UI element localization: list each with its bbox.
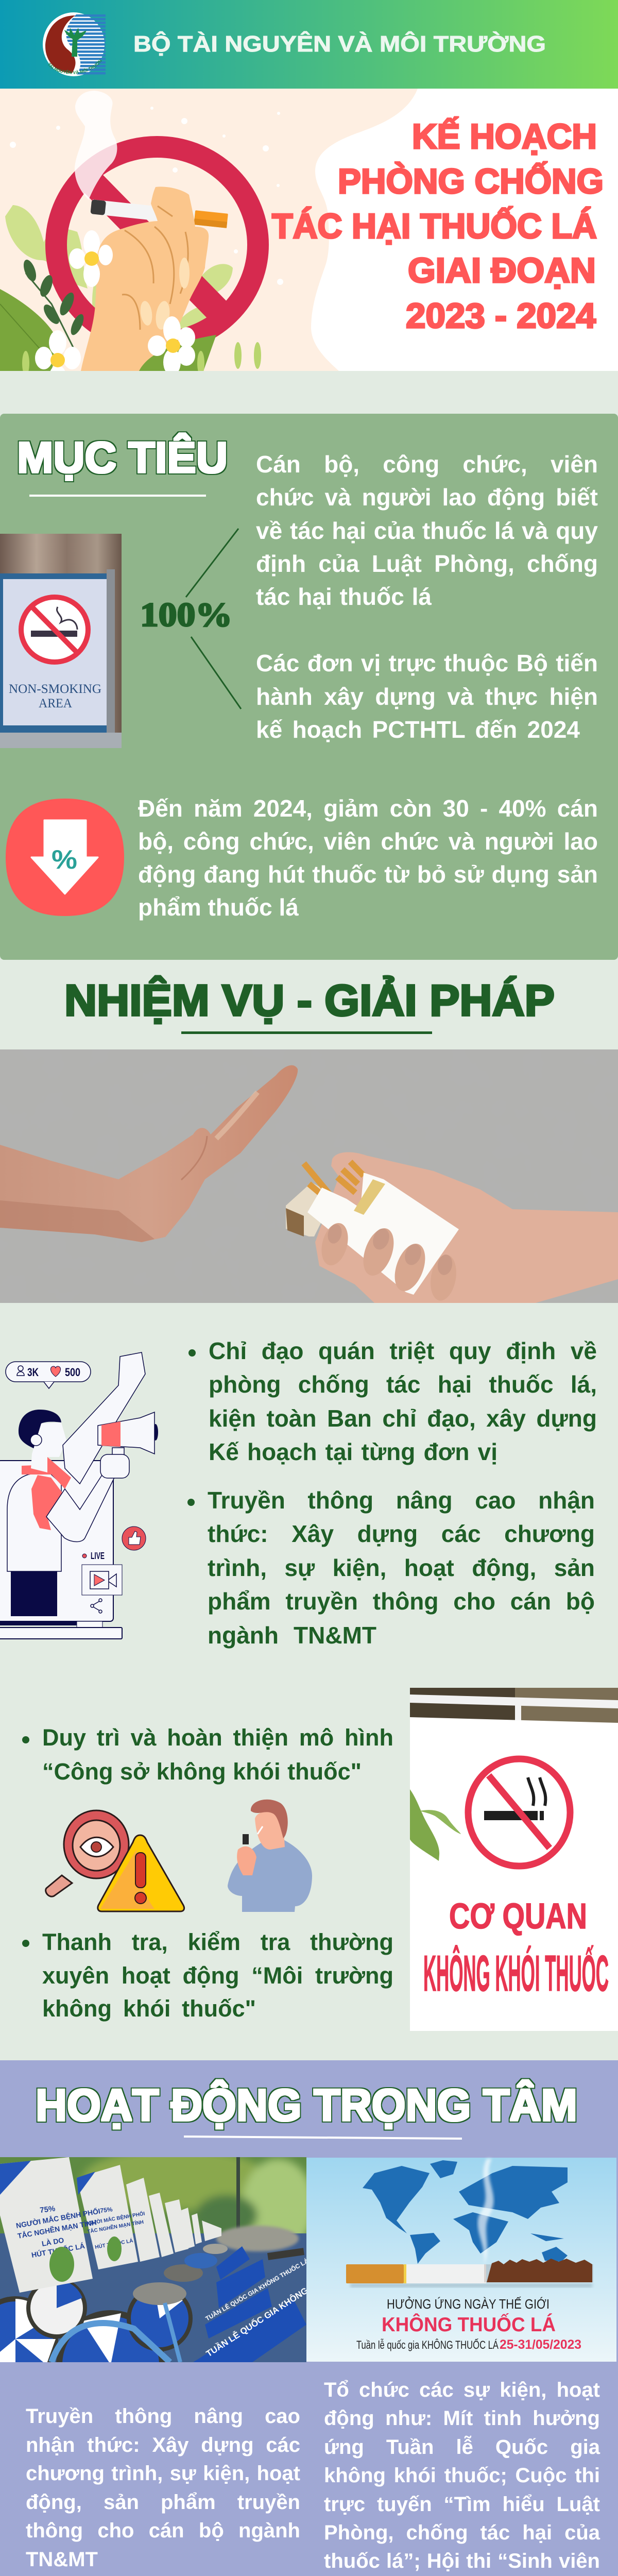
photo: bicycles with campaign signs: NGƯỜI MẮC BỆNH PHỔI xyxy=(15,2206,101,2230)
panel: mục tiêu xyxy=(0,414,618,960)
sign text xyxy=(423,1896,609,2002)
photo: non-smoking sign: AREA xyxy=(39,697,72,710)
icon: thumbs up xyxy=(122,1527,146,1550)
text bullet: maintain model xyxy=(22,1724,393,1785)
hero title: TÁC HẠI THUỐC LÁ xyxy=(272,206,597,246)
text: goal one: định của Luật Phòng, chống xyxy=(256,550,598,577)
illustration: person with megaphone xyxy=(0,1352,618,2031)
text: communication activity xyxy=(26,2405,300,2571)
text: goal one xyxy=(256,451,598,610)
text: communication activity: chương trình, sự kiện, hoạt xyxy=(26,2462,300,2485)
refusing hand xyxy=(0,1065,298,1242)
poster text: HƯỞNG ỨNG NGÀY THẾ GIỚI xyxy=(387,2296,550,2312)
text: communication activity: Truyền thông nâng cao xyxy=(26,2405,300,2428)
cigarette with crowd xyxy=(346,2259,593,2287)
heading: nhiệm vụ giải pháp: NHIỆM VỤ - GIẢI PHÁP xyxy=(64,976,555,1025)
text: communication activity: TN&MT xyxy=(26,2548,98,2571)
photo: smoke-free agency sign xyxy=(410,1688,618,2031)
campaign signs xyxy=(0,2157,221,2293)
photo: non-smoking sign: NON-SMOKING xyxy=(9,682,101,696)
text bullet: direction: Kế hoạch tại từng đơn vị xyxy=(209,1438,497,1465)
text bullet: inspection: xuyên hoạt động “Môi trường xyxy=(42,1962,393,1989)
cigarette xyxy=(90,199,228,228)
world map xyxy=(363,2160,568,2264)
icon: percent down arrow xyxy=(6,799,124,916)
text: events activity: không khói thuốc; Cuộc thi xyxy=(324,2464,600,2487)
hero title: GIAI ĐOẠN xyxy=(408,251,596,290)
icon: magnifier and warning xyxy=(46,1810,184,1911)
section: nhiệm vụ - giải pháp xyxy=(0,975,618,2031)
text: reduction goal: Đến năm 2024, giảm còn 30 - 40% cán xyxy=(138,795,598,822)
photo: hand refusing cigarettes xyxy=(0,1049,618,1303)
text: goal one: chức và người lao động biết xyxy=(256,484,598,511)
heading: hoạt động trọng tâm: HOẠT ĐỘNG TRỌNG TÂM xyxy=(36,2080,577,2130)
text: events activity: ứng Tuần lễ Quốc gia xyxy=(324,2436,600,2459)
text: goal two: kế hoạch PCTHTL đến 2024 xyxy=(256,716,580,743)
text bullet: maintain model: “Công sở không khói thuốc" xyxy=(42,1758,362,1785)
text: goal one: về tác hại của thuốc lá và quy xyxy=(256,517,598,544)
hand xyxy=(81,187,209,371)
poster text: KHÔNG THUỐC LÁ xyxy=(382,2313,556,2336)
photo: bicycles with campaign signs: TUẦN LỄ QUỐC GIA KHÔNG THUỐC LÁ xyxy=(204,2259,350,2359)
flowers xyxy=(35,230,195,371)
hero title: KẾ HOẠCH xyxy=(412,116,597,156)
photo: bicycles with campaign signs: TUẦN LỄ QUỐC GIA KHÔNG THUỐC LÁ xyxy=(204,2257,310,2323)
illustration: man lighting a cigarette xyxy=(228,1800,312,1912)
speech bubble stats: 500 xyxy=(65,1366,80,1379)
photo: bicycles with campaign signs: TẮC NGHẼN MẠN TÍNH xyxy=(17,2217,97,2240)
speech bubble stats: 3K xyxy=(27,1366,39,1379)
poster text: 25-31/05/2023 xyxy=(500,2337,581,2352)
text: reduction goal: phẩm thuốc lá xyxy=(138,894,299,921)
text: communication activity: nhận thức: Xây dựng các xyxy=(26,2434,300,2456)
photo: non-smoking sign xyxy=(0,534,122,748)
text: goal two: Các đơn vị trực thuộc Bộ tiến xyxy=(256,650,598,676)
stat: 100%: 100% xyxy=(140,596,232,634)
text: goal one: Cán bộ, công chức, viên xyxy=(256,451,598,478)
smoke over map xyxy=(478,2159,494,2265)
connector lines xyxy=(186,529,241,709)
campaign banners xyxy=(193,2246,306,2362)
header title: BỘ TÀI NGUYÊN VÀ MÔI TRƯỜNG xyxy=(133,30,546,57)
text bullet: direction xyxy=(188,1337,597,1465)
text: events activity: động như: Mít tinh hưởng xyxy=(324,2407,600,2430)
photo: bicycles with campaign signs xyxy=(0,2148,350,2416)
illustration: no smoking hand xyxy=(0,91,283,390)
text bullet: communication: ngành TN&MT xyxy=(208,1622,376,1649)
photo: bicycles with campaign signs: LÀ DO xyxy=(41,2236,65,2248)
text: events activity: thuốc lá”; Hội thi “Sinh viên xyxy=(324,2550,600,2572)
text bullet: direction: kiện toàn Ban chỉ đạo, xây dựng xyxy=(209,1405,597,1432)
text bullet: direction: Chỉ đạo quán triệt quy định về xyxy=(209,1337,597,1364)
photo: bicycles with campaign signs: 75% xyxy=(39,2204,56,2215)
text bullet: communication xyxy=(187,1487,595,1649)
poster: world no tobacco week xyxy=(306,2158,616,2362)
text: reduction goal xyxy=(138,795,598,921)
icon: percent down arrow: % xyxy=(52,845,77,875)
wheels xyxy=(0,2280,191,2416)
text: goal two: hành xây dựng và thực hiện xyxy=(256,683,598,710)
header band xyxy=(0,0,618,89)
icon: ministry logo xyxy=(43,12,106,76)
text: events activity: Tổ chức các sự kiện, hoạt xyxy=(324,2379,600,2401)
photo: bicycles with campaign signs: HÚT THUỐC LÁ xyxy=(94,2236,133,2250)
offering hand xyxy=(315,1152,618,1303)
text: goal one: tác hại thuốc lá xyxy=(256,583,432,610)
text bullet: inspection: Thanh tra, kiểm tra thường xyxy=(42,1929,393,1955)
hero title: PHÒNG CHỐNG xyxy=(338,161,604,201)
text bullet: inspection: không khói thuốc" xyxy=(42,1995,256,2022)
icon: prohibition ring xyxy=(56,147,258,343)
text: communication activity: thông cho cán bộ ngành xyxy=(26,2519,300,2542)
text bullet: inspection xyxy=(22,1929,393,2022)
text: reduction goal: động đang hút thuốc từ bỏ sử dụng sản xyxy=(138,861,598,888)
text bullet: direction: phòng chống tác hại thuốc lá, xyxy=(209,1371,597,1398)
photo: bicycles with campaign signs: HÚT THUỐC LÁ xyxy=(31,2241,85,2259)
hero title xyxy=(272,116,604,335)
text: events activity: trực tuyến “Tìm hiểu Luật xyxy=(324,2493,600,2516)
icon: share xyxy=(91,1599,102,1613)
live label: LIVE xyxy=(91,1551,105,1561)
text: communication activity: động, sản phẩm truyền xyxy=(26,2491,300,2514)
text bullet: communication: thức: Xây dựng các chương xyxy=(208,1520,595,1547)
poster text: Tuần lễ quốc gia KHÔNG THUỐC LÁ xyxy=(356,2338,499,2351)
photo: bicycles with campaign signs: NGƯỜI MẮC BỆNH PHỔI xyxy=(84,2210,145,2227)
photo: bicycles with campaign signs: 75% xyxy=(100,2206,113,2214)
sign text: CƠ QUAN xyxy=(449,1896,587,1936)
text: events activity: Phòng, chống tác hại của xyxy=(324,2521,600,2544)
text bullet: communication: phẩm truyền thông cho cán bộ xyxy=(208,1588,595,1615)
speech bubble stats xyxy=(6,1362,91,1388)
heading: mục tiêu: MỤC TIÊU xyxy=(17,433,228,482)
live label xyxy=(82,1551,105,1561)
leaves xyxy=(0,258,261,376)
text bullet: communication: Truyền thông nâng cao nhận xyxy=(208,1487,595,1514)
text: reduction goal: bộ, công chức, viên chức và người lao xyxy=(138,828,598,855)
hero banner xyxy=(0,89,618,371)
poster text xyxy=(356,2296,581,2352)
icon: video xyxy=(82,1565,122,1595)
hero title: 2023 - 2024 xyxy=(406,296,596,335)
bicycle seats and frame xyxy=(52,2244,304,2362)
text: events activity xyxy=(324,2379,600,2572)
text bullet: communication: trình, sự kiện, hoạt động, sản xyxy=(208,1554,595,1581)
panel: hoạt động trọng tâm xyxy=(0,2060,618,2576)
cigarette pack xyxy=(286,1162,459,1295)
text bullet: maintain model: Duy trì và hoàn thiện mô hình xyxy=(42,1724,393,1751)
text: goal two xyxy=(256,650,598,743)
smoke xyxy=(75,91,117,200)
photo: bicycles with campaign signs: TẮC NGHẼN MẠN TÍNH xyxy=(87,2218,144,2235)
